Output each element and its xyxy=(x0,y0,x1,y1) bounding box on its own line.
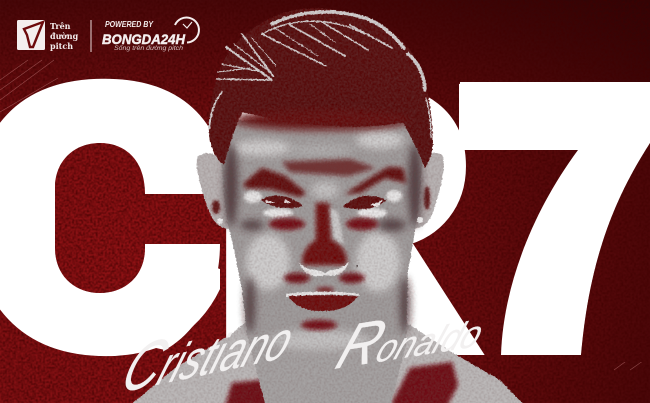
counter of the C xyxy=(55,143,226,293)
face side shadows xyxy=(224,143,422,333)
hair highlights xyxy=(209,12,431,138)
logo: Tren duong pitch xyxy=(17,20,81,51)
facial mole xyxy=(356,265,358,267)
Bongda24h wordmark: BONGDA24H xyxy=(102,31,186,47)
logo wordmark: Trên xyxy=(50,21,71,31)
cheek and forehead highlights xyxy=(232,131,404,350)
logo: powered by Bongda24h xyxy=(102,18,199,52)
mouth xyxy=(286,292,359,311)
tagline: Sống trên đường pitch xyxy=(114,45,184,52)
outer edge of the 7 xyxy=(581,143,650,362)
soft hairline xyxy=(234,110,410,130)
decorative hatching xyxy=(0,60,650,370)
left ear xyxy=(197,153,232,229)
upper lip shadows xyxy=(284,273,365,292)
brow and forehead shadows xyxy=(243,159,406,197)
right ear xyxy=(412,153,444,228)
chin shadow xyxy=(301,320,337,330)
logo divider xyxy=(90,20,92,52)
clock icon xyxy=(175,18,199,42)
neck xyxy=(243,280,408,403)
nose xyxy=(299,203,349,276)
shirt and shoulders xyxy=(133,323,522,403)
hair mass xyxy=(209,8,433,168)
earrings xyxy=(217,217,423,224)
logo wordmark: đường xyxy=(50,31,79,41)
face base xyxy=(220,120,424,335)
ear shading xyxy=(212,186,430,214)
logo mark xyxy=(17,20,45,50)
logo wordmark: pitch xyxy=(50,41,73,51)
right eye xyxy=(343,190,402,218)
left eye xyxy=(244,191,303,218)
letter C weight reinforcement xyxy=(30,110,220,350)
portrait of Cristiano Ronaldo xyxy=(133,8,522,403)
signature: Cristiano Ronaldo xyxy=(112,289,498,403)
under-eye shadows xyxy=(269,218,378,230)
letter 7 weight reinforcement xyxy=(460,82,650,355)
powered by label: POWERED BY xyxy=(105,20,154,29)
shirt red patches xyxy=(224,362,458,403)
signature last name: Ronaldo xyxy=(328,289,498,383)
